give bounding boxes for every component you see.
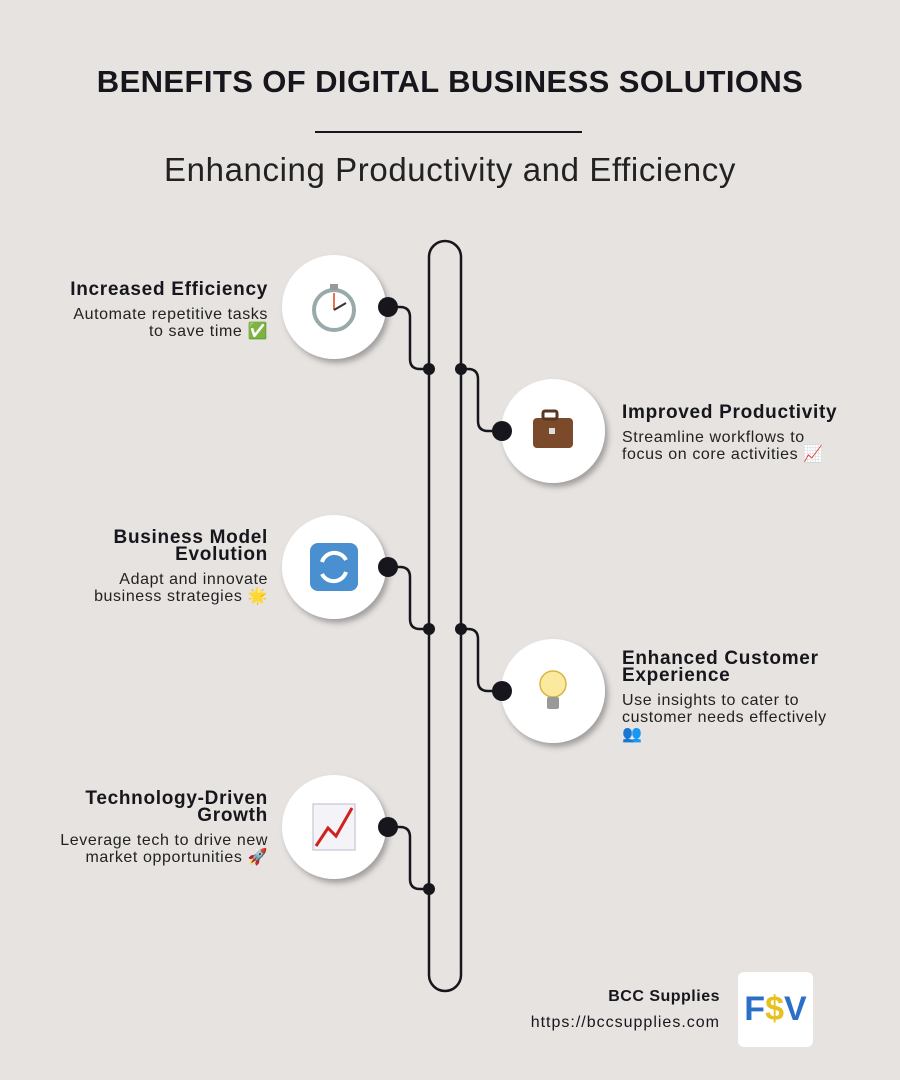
item: Technology-Driven Growth: market opportunities 🚀 [85,849,268,866]
item: Improved Productivity: focus on core activities 📈 [622,446,824,463]
item: Enhanced Customer Experience: customer needs effectively [622,709,827,726]
item: Increased Efficiency: Automate repetitive tasks [73,306,268,323]
item: Technology-Driven Growth: Growth [197,805,268,826]
item: Increased Efficiency [70,279,268,340]
item: Business Model Evolution: Adapt and innovate [119,571,268,588]
item: Business Model Evolution: Business Model [114,527,268,548]
icon: briefcase [533,411,573,448]
footer brand: https://bccsupplies.com [531,1014,720,1031]
item: Technology-Driven Growth: Technology-Driven [85,788,268,809]
item: Increased Efficiency: Increased Efficiency [70,279,268,300]
title: BENEFITS OF DIGITAL BUSINESS SOLUTIONS [97,64,803,99]
icon: refresh arrows [310,543,358,591]
item: Enhanced Customer Experience: 👥 [622,726,643,743]
item: Improved Productivity [622,402,837,463]
item: Business Model Evolution: Evolution [175,544,268,565]
item: Enhanced Customer Experience [622,648,827,743]
item: Enhanced Customer Experience: Experience [622,665,730,686]
footer brand: BCC Supplies [608,988,720,1005]
item: Enhanced Customer Experience: Use insights to cater to [622,692,799,709]
icon: chart [313,804,355,850]
footer brand [531,988,720,1031]
item: Business Model Evolution: business strategies 🌟 [94,588,268,605]
icon: stopwatch [314,284,354,330]
item: Improved Productivity: Streamline workflows to [622,429,805,446]
item: Enhanced Customer Experience: Enhanced Customer [622,648,819,669]
item: Business Model Evolution [94,527,268,605]
subtitle: Enhancing Productivity and Efficiency [164,151,736,188]
logo: F$V [744,990,807,1028]
item: Increased Efficiency: to save time ✅ [149,323,268,340]
item: Technology-Driven Growth: Leverage tech to drive new [60,832,268,849]
logo [738,972,813,1047]
icon: light bulb [540,671,566,709]
item: Improved Productivity: Improved Productivity [622,402,837,423]
item: Technology-Driven Growth [60,788,268,866]
